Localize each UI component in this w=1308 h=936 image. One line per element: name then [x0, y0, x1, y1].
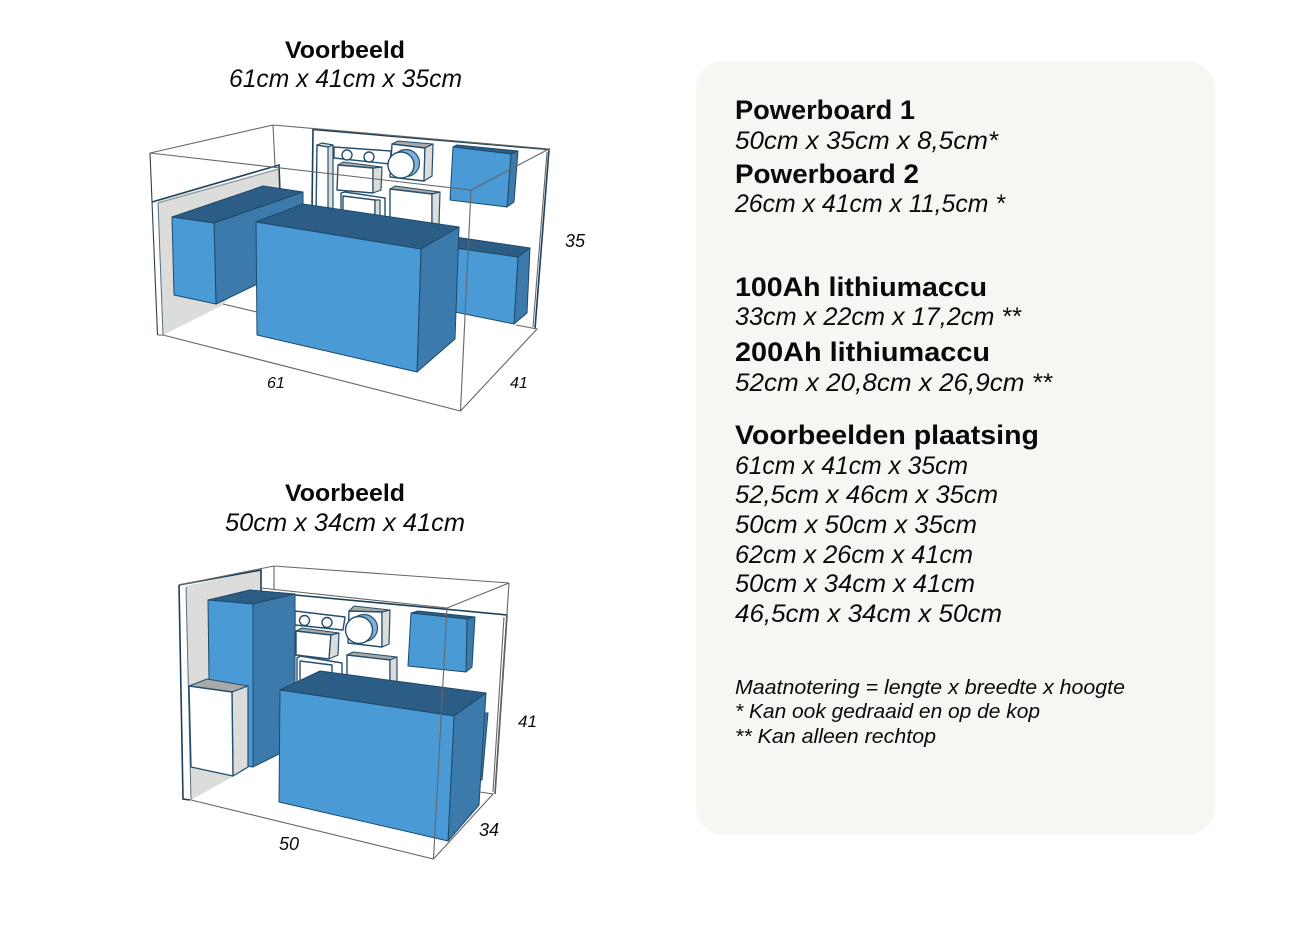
small blue box on back wall [408, 611, 475, 672]
heading: top example: Voorbeeld [285, 37, 405, 64]
placement examples: 52,5cm x 46cm x 35cm [735, 481, 998, 509]
heading: top example [229, 37, 462, 93]
blue box behind main box [476, 713, 488, 780]
heading: bottom example [225, 480, 465, 537]
battery sizes: 52cm x 20,8cm x 26,9cm ** [735, 369, 1053, 397]
wireframe outline [179, 566, 509, 859]
powerboard sizes: Powerboard 1 [735, 95, 915, 125]
placement examples: 50cm x 50cm x 35cm [735, 511, 977, 539]
dimension labels [279, 712, 537, 854]
left wall board [179, 570, 261, 800]
white box [189, 679, 248, 776]
notes: * Kan ook gedraaid en op de kop [735, 701, 1040, 723]
dimension labels: 50 [279, 834, 299, 854]
component: terminal bar [334, 147, 391, 164]
powerboard sizes [734, 95, 1006, 218]
notes: ** Kan alleen rechtop [735, 726, 936, 748]
component: small box [337, 162, 382, 193]
panel: specifications [696, 61, 1215, 835]
dimension labels: 61 [267, 375, 285, 392]
powerboard sizes: 26cm x 41cm x 11,5cm * [734, 190, 1006, 218]
notes: Maatnotering = lengte x breedte x hoogte [735, 677, 1125, 699]
dimension labels: 41 [518, 712, 537, 731]
blue main box [256, 204, 459, 372]
component: vertical strip [316, 143, 333, 215]
floor line behind main box [223, 304, 257, 312]
battery sizes: 33cm x 22cm x 17,2cm ** [735, 303, 1022, 331]
dimension labels: 34 [479, 820, 499, 840]
placement examples: 50cm x 34cm x 41cm [735, 570, 975, 598]
component: square box with dial [346, 606, 390, 647]
battery sizes [735, 272, 1053, 397]
placement examples: 62cm x 26cm x 41cm [735, 541, 973, 569]
diagram: top example 61 x 41 x 35 [150, 125, 586, 411]
placement examples: 61cm x 41cm x 35cm [735, 452, 968, 480]
placement examples [735, 420, 1039, 628]
heading: bottom example: Voorbeeld [285, 480, 405, 507]
blue box left [172, 186, 303, 304]
dimension labels [267, 231, 586, 392]
battery sizes: 200Ah lithiumaccu [735, 337, 990, 367]
component: small box [296, 628, 339, 659]
component: square box with dial [388, 141, 433, 181]
diagram: bottom example 50 x 34 x 41 [179, 566, 537, 859]
back wall panel [295, 595, 507, 794]
wireframe outline [150, 125, 549, 411]
powerboard sizes: 50cm x 35cm x 8,5cm* [735, 127, 999, 155]
blue main box [279, 671, 486, 841]
component: framed box [297, 656, 342, 690]
heading: bottom example: 50cm x 34cm x 41cm [225, 509, 465, 537]
heading: top example: 61cm x 41cm x 35cm [229, 65, 462, 93]
dimension labels: 41 [510, 375, 528, 392]
blue box right [455, 237, 530, 324]
left wall board [152, 165, 280, 335]
tall blue box [208, 590, 295, 767]
small blue box on back wall [450, 145, 518, 207]
battery sizes: 100Ah lithiumaccu [735, 272, 987, 302]
component: tall box [390, 186, 440, 225]
notes [735, 677, 1125, 748]
powerboard sizes: Powerboard 2 [735, 159, 919, 189]
component: terminal bar [295, 611, 345, 630]
component: tall box [347, 652, 397, 690]
component: framed box [341, 192, 385, 225]
placement examples: 46,5cm x 34cm x 50cm [735, 600, 1002, 628]
back wall panel [312, 129, 549, 329]
dimension labels: 35 [565, 231, 586, 251]
placement examples: Voorbeelden plaatsing [735, 420, 1039, 450]
